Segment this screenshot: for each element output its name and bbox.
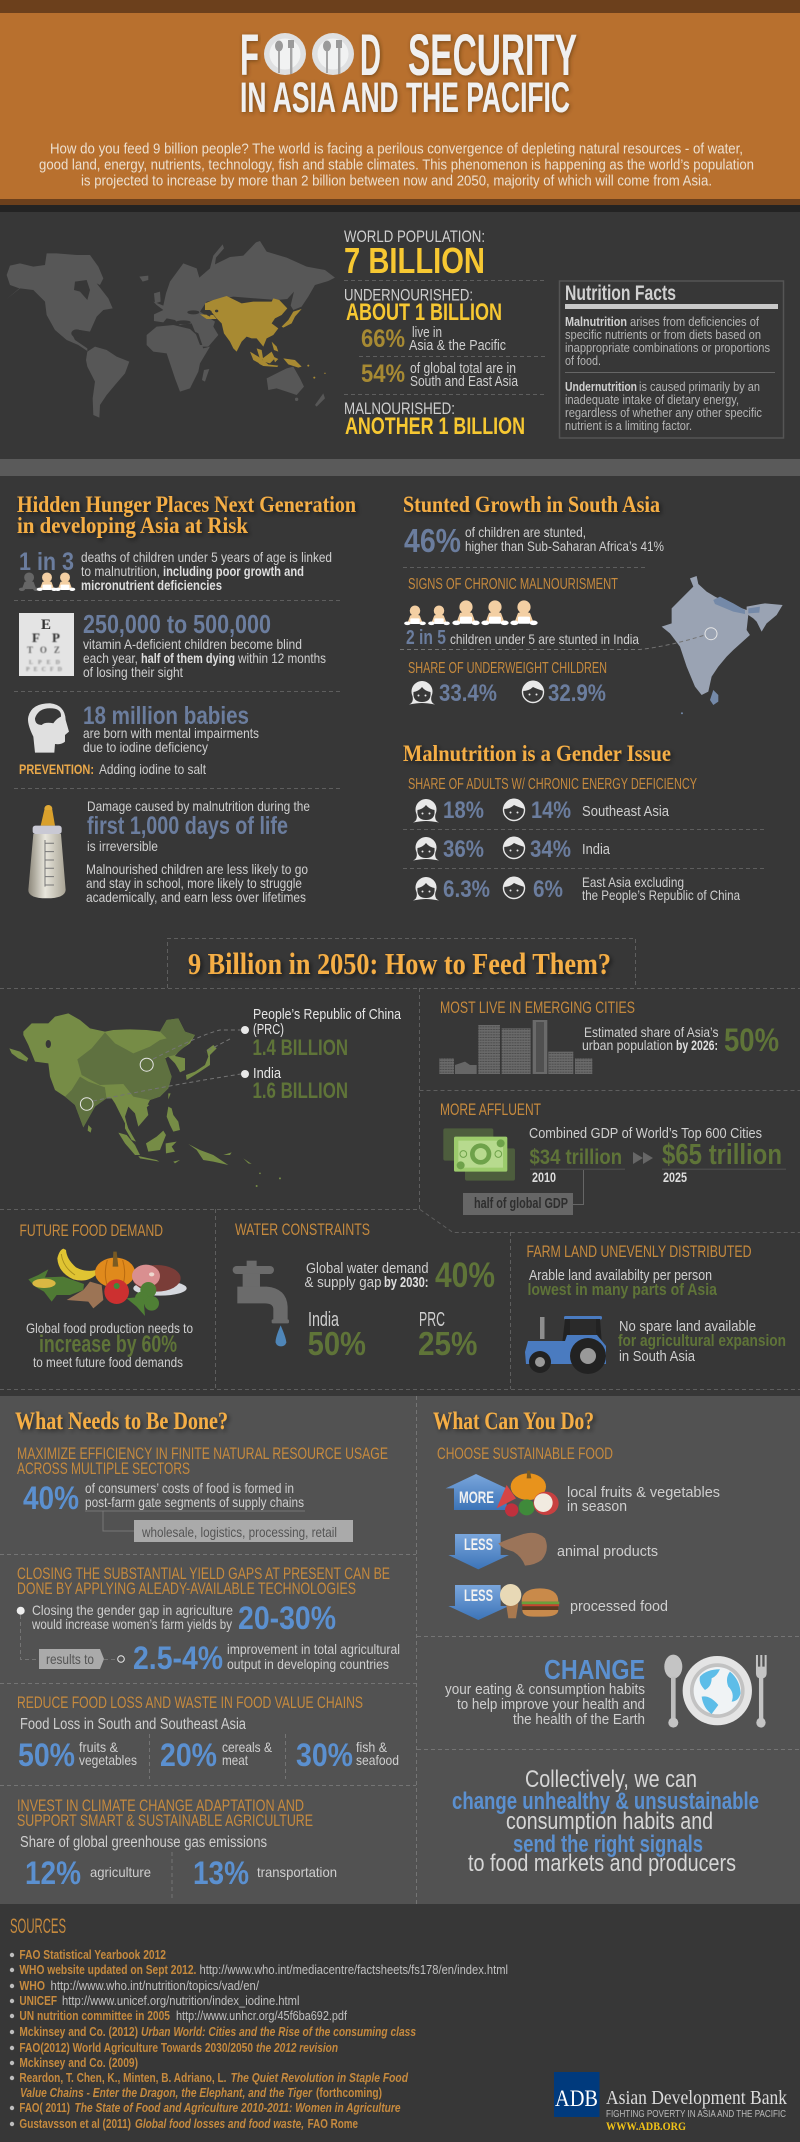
share of underweight children: SHARE OF UNDERWEIGHT CHILDREN: [408, 660, 607, 677]
water constraints: [233, 1221, 495, 1362]
callout: half of global GDP: half of global GDP: [474, 1195, 568, 1212]
bullets: [10, 1953, 14, 2126]
stat: blindness: half of them dying: [141, 650, 235, 666]
block: food loss: vegetables: [79, 1752, 137, 1768]
block: climate change: transportation: [257, 1864, 337, 1880]
signs of chronic malnourishment: 2 in 5: [406, 627, 446, 649]
source list: WHO website updated on Sept 2012.: [19, 1962, 196, 1977]
panel: sources: [10, 1915, 508, 2131]
tag: results to: [39, 1649, 104, 1669]
stat: blindness: 250,000 to 500,000: [83, 609, 271, 639]
block: food loss: Food Loss in South and Southeast Asia: [20, 1716, 246, 1733]
block: food loss: [17, 1694, 399, 1900]
stat: iodine: Adding iodine to salt: [99, 761, 206, 777]
title: D: [360, 23, 381, 88]
panel: nutrition facts: Nutrition Facts: [565, 282, 676, 305]
block: food loss: meat: [222, 1752, 248, 1768]
water constraints: 25%: [418, 1325, 478, 1362]
logo: Asian Development Bank: [554, 2072, 787, 2133]
water constraints: & supply gap: [304, 1274, 382, 1291]
icon: less arrow with meat: [448, 1533, 547, 1569]
panel: nutrition facts: arises from deficiencies of: [630, 314, 759, 329]
panel: nutrition facts: specific nutrients or from diets based on: [565, 327, 761, 342]
block: maximize efficiency: of consumers’ costs of food is formed in: [85, 1480, 294, 1496]
row: East Asia: the People’s Republic of China: [582, 887, 740, 903]
block: food loss: cereals &: [222, 1739, 273, 1755]
icon: eye chart: F: [32, 630, 40, 645]
panel: nutrition facts: nutrient is a limiting factor.: [565, 418, 692, 433]
emerging cities: Estimated share of Asia’s: [584, 1024, 718, 1040]
source list: Value Chains - Enter the Dragon, the Elephant, and the Tiger: [20, 2085, 313, 2100]
row: East Asia: 6%: [533, 876, 563, 903]
heading: [17, 492, 356, 538]
intro paragraph: is projected to increase by more than 2 billion between now and 2050, majority of which will come from Asia.: [81, 174, 712, 190]
stat: 1 in 3: [19, 548, 332, 593]
emerging cities: MOST LIVE IN EMERGING CITIES: [440, 999, 635, 1017]
emerging cities: by 2026:: [676, 1037, 718, 1053]
block: yield gaps: would increase women’s farm yields by: [31, 1616, 232, 1632]
farm land: [525, 1243, 786, 1374]
stat: blindness: each year,: [83, 650, 138, 666]
block: yield gaps: improvement in total agricultural: [227, 1641, 400, 1657]
block: climate change: agriculture: [90, 1864, 151, 1880]
panel: nutrition facts: inappropriate combinations or proportions: [565, 340, 770, 355]
farm land: Arable land availabilty per person: [529, 1268, 712, 1284]
block: climate change: INVEST IN CLIMATE CHANGE ADAPTATION AND: [17, 1797, 304, 1815]
undernourished stat: UNDERNOURISHED:: [344, 286, 473, 304]
water constraints: WATER CONSTRAINTS: [235, 1221, 370, 1239]
more affluent: [440, 1101, 786, 1215]
block: food loss: 20%: [160, 1737, 217, 1773]
row: Southeast Asia: Southeast Asia: [582, 804, 670, 820]
logo: Asian Development Bank: ADB: [555, 2086, 598, 2111]
heading: Hidden Hunger Places Next Generation: [17, 492, 356, 517]
panel: 9 billion in 2050: [0, 938, 800, 1390]
row: India: 36%: [443, 836, 484, 863]
icon: baby bottle: [28, 805, 66, 898]
panel: what can you do: [417, 1408, 800, 1877]
source list: The State of Food and Agriculture 2010-2011: Women in Agriculture: [74, 2100, 400, 2115]
stat: 1 in 3: deaths of children under 5 years of age is linked: [81, 549, 332, 565]
intro paragraph: [39, 142, 754, 190]
source list: WHO: [19, 1978, 45, 1993]
block: change habits: your eating & consumption habits: [445, 1681, 645, 1698]
block: maximize efficiency: post-farm gate segments of supply chains: [85, 1494, 304, 1510]
stat: first 1,000 days: and stay in school, more likely to struggle: [86, 875, 302, 891]
future food demand: increase by 60%: [39, 1331, 177, 1358]
stat: 46%: of children are stunted,: [465, 524, 586, 540]
panel: nutrition facts: [560, 281, 784, 438]
icon: eye chart: PECFD: [26, 667, 66, 673]
undernourished stat: ABOUT 1 BILLION: [346, 299, 502, 326]
source list: Mckinsey and Co. (2012): [19, 2024, 138, 2039]
heading: in developing Asia at Risk: [17, 513, 248, 538]
stat: iodine: [19, 702, 259, 777]
block: food loss: fish &: [356, 1739, 388, 1755]
source list: the 2012 revision: [256, 2040, 338, 2055]
panel: stunted growth: [400, 492, 783, 714]
block: yield gaps: output in developing countries: [227, 1656, 389, 1672]
map labels and markers: [80, 1006, 402, 1110]
stat: first 1,000 days: Malnourished children are less likely to go: [86, 861, 308, 877]
text: processed food: processed food: [570, 1598, 668, 1615]
panel: nutrition facts: is caused primarily by an: [639, 379, 760, 394]
icon: tractor: [525, 1316, 606, 1374]
icon: less arrow with processed food: [448, 1584, 559, 1620]
water constraints: Global water demand: [306, 1260, 428, 1277]
source list: FAO Statistical Yearbook 2012: [19, 1947, 166, 1962]
stat: iodine: due to iodine deficiency: [83, 739, 208, 755]
undernourished stat: [344, 286, 519, 390]
block: maximize efficiency: MAXIMIZE EFFICIENCY IN FINITE NATURAL RESOURCE USAGE: [17, 1445, 388, 1463]
world population stat: WORLD POPULATION:: [344, 227, 485, 246]
row: India: 34%: [530, 836, 571, 863]
heading: 9 Billion in 2050: How to Feed Them?: [188, 946, 611, 981]
panel: what can you do: MORE: [459, 1488, 494, 1507]
row: East Asia: [413, 874, 740, 903]
world population stat: 7 BILLION: [344, 240, 485, 281]
more affluent: $34 trillion: [530, 1146, 622, 1169]
icon: plate with globe, spoon and fork: [664, 1655, 767, 1728]
malnourished stat: ANOTHER 1 BILLION: [345, 413, 525, 440]
share of underweight children: 32.9%: [548, 680, 606, 707]
source list: The Quiet Revolution in Staple Food: [231, 2070, 409, 2085]
map: India: [662, 576, 783, 714]
icon: skyline: [439, 1020, 592, 1074]
panel: nutrition facts: inadequate intake of dietary energy,: [565, 392, 739, 407]
undernourished stat: South and East Asia: [410, 373, 519, 390]
heading: SOURCES: [10, 1915, 66, 1938]
source list: http://www.unicef.org/nutrition/index_iodine.html: [62, 1993, 300, 2008]
block: maximize efficiency: ACROSS MULTIPLE SECTORS: [17, 1460, 190, 1478]
map labels and markers: 1.6 BILLION: [252, 1078, 348, 1103]
source list: FAO( 2011): [19, 2100, 70, 2115]
icon: head with brain: [28, 703, 69, 753]
callout: half of global GDP: [463, 1193, 573, 1215]
text: local fruits: in season: [567, 1498, 627, 1515]
map labels and markers: 1.4 BILLION: [252, 1035, 348, 1060]
stat: iodine: 18 million babies: [83, 702, 249, 730]
lower section background: [0, 1396, 800, 1904]
source list: Urban World: Cities and the Rise of the consuming class: [141, 2024, 416, 2039]
icon: second plate: [312, 33, 354, 75]
panel: nutrition facts: of food.: [565, 353, 601, 368]
stat: first 1,000 days: Damage caused by malnutrition during the: [87, 798, 310, 814]
signs of chronic malnourishment: SIGNS OF CHRONIC MALNOURISMENT: [408, 576, 618, 593]
stat: blindness: [83, 609, 326, 680]
block: collective call to action: [452, 1766, 759, 1877]
block: yield gaps: Closing the gender gap in agriculture: [32, 1602, 233, 1618]
stat: 1 in 3: to malnutrition,: [81, 563, 160, 579]
future food demand: to meet future food demands: [33, 1354, 183, 1370]
heading: Stunted Growth in South Asia: [403, 492, 660, 517]
stat: first 1,000 days: [86, 798, 310, 905]
arrow: growth: [633, 1152, 653, 1164]
source list: http://www.who.int/nutrition/topics/vad/en/: [50, 1978, 259, 1993]
panel: nutrition facts: Malnutrition: [565, 314, 627, 329]
water constraints: PRC: [419, 1309, 445, 1331]
panel: header: [0, 0, 800, 212]
block: collective call to action: consumption habits and: [506, 1808, 713, 1835]
block: climate change: 12%: [25, 1855, 81, 1891]
block: climate change: Share of global greenhouse gas emissions: [20, 1834, 267, 1851]
source list: http://www.unhcr.org/45f6ba692.pdf: [176, 2008, 347, 2023]
icon: eye chart: [19, 613, 74, 676]
share of underweight children: [408, 660, 607, 707]
signs of chronic malnourishment: children under 5 are stunted in India: [450, 631, 639, 647]
block: collective call to action: send the right signals: [513, 1831, 703, 1858]
more affluent: 2025: [663, 1170, 687, 1185]
undernourished stat: of global total are in: [410, 360, 516, 377]
source list: Reardon, T. Chen, K., Minten, B. Adriano, L.: [19, 2070, 227, 2085]
intro paragraph: How do you feed 9 billion people? The world is facing a perilous convergence of depleting natural resources - of water,: [50, 142, 743, 158]
source list: FAO(2012) World Agriculture Towards 2030/2050: [19, 2040, 253, 2055]
block: change habits: to help improve your health and: [457, 1696, 645, 1713]
block: climate change: [17, 1797, 337, 1891]
divider band: [0, 459, 800, 476]
source list: FAO Rome: [308, 2116, 358, 2131]
world map: [7, 241, 335, 418]
title: SECURITY: [408, 23, 577, 88]
signs of chronic malnourishment: [404, 576, 639, 649]
block: yield gaps: DONE BY APPLYING ALEADY-AVAILABLE TECHNOLOGIES: [17, 1580, 356, 1598]
row: Southeast Asia: 18%: [443, 797, 484, 824]
row: East Asia: 6.3%: [443, 876, 490, 903]
block: change habits: [445, 1654, 645, 1728]
future food demand: [20, 1222, 193, 1370]
share of underweight children: 33.4%: [439, 680, 497, 707]
stat: 1 in 3: 1 in 3: [19, 548, 74, 576]
stat: blindness: within 12 months: [237, 650, 326, 666]
subheading: CHOOSE SUSTAINABLE FOOD: [437, 1445, 613, 1463]
map labels and markers: People’s Republic of China: [253, 1006, 402, 1023]
logo: Asian Development Bank: WWW.ADB.ORG: [606, 2119, 686, 2133]
undernourished stat: live in: [412, 324, 442, 341]
panel: gender issue: [403, 741, 767, 903]
block: yield gaps: [17, 1565, 400, 1676]
water constraints: 40%: [435, 1256, 495, 1295]
malnourished stat: [344, 399, 525, 440]
block: change habits: the health of the Earth: [513, 1711, 645, 1728]
icon: eye chart: P: [52, 630, 60, 645]
icon: faucet: [233, 1261, 289, 1346]
title: IN ASIA AND THE PACIFIC: [240, 74, 570, 122]
block: yield gaps: 2.5-4%: [133, 1640, 223, 1676]
map: Asia: [9, 1013, 281, 1187]
panel: what can you do: LESS: [464, 1535, 493, 1554]
block: yield gaps: CLOSING THE SUBSTANTIAL YIELD GAPS AT PRESENT CAN BE: [17, 1565, 390, 1583]
stat: 46%: [404, 522, 664, 559]
title: F: [240, 23, 259, 88]
farm land: No spare land available: [619, 1318, 756, 1335]
panel: hidden hunger: [14, 492, 356, 905]
water constraints: by 2030:: [384, 1274, 428, 1291]
block: maximize efficiency: [17, 1445, 388, 1542]
future food demand: Global food production needs to: [26, 1320, 193, 1336]
world population stat: [344, 227, 485, 281]
title: [240, 23, 577, 122]
block: food loss: seafood: [356, 1752, 399, 1768]
block: collective call to action: Collectively, we can: [525, 1766, 697, 1793]
stat: first 1,000 days: first 1,000 days of life: [87, 812, 288, 840]
row: India: [413, 836, 611, 863]
source list: Global food losses and food waste,: [135, 2116, 304, 2131]
undernourished stat: 66%: [361, 325, 405, 353]
source list: UN nutrition committee in 2005: [19, 2008, 170, 2023]
stat: blindness: of losing their sight: [83, 664, 183, 680]
source list: (forthcoming): [316, 2085, 382, 2100]
map labels and markers: (PRC): [253, 1021, 284, 1038]
water constraints: 50%: [308, 1325, 366, 1362]
text: local fruits: [567, 1484, 720, 1515]
icon: more arrow with fruit and vegetables: [446, 1471, 559, 1517]
stat: iodine: PREVENTION:: [19, 761, 94, 777]
block: climate change: 13%: [193, 1855, 249, 1891]
text: local fruits: local fruits & vegetables: [567, 1484, 720, 1501]
block: food loss: fruits &: [79, 1739, 119, 1755]
source list: http://www.who.int/mediacentre/factsheets/fs178/en/index.html: [200, 1962, 508, 1977]
panel: what can you do: LESS: [464, 1586, 493, 1605]
undernourished stat: 54%: [361, 360, 405, 388]
source list: UNICEF: [19, 1993, 57, 2008]
heading: What Needs to Be Done?: [15, 1408, 228, 1435]
icon: food group: [28, 1249, 187, 1316]
source list: [19, 1947, 508, 2131]
row: India: India: [582, 842, 611, 858]
heading: What Can You Do?: [433, 1408, 594, 1435]
water constraints: India: [308, 1309, 340, 1331]
icon: eye chart: E: [41, 617, 51, 633]
block: maximize efficiency: 40%: [23, 1480, 79, 1516]
panel: world population: [7, 227, 783, 440]
stat: 1 in 3: micronutrient deficiencies: [81, 577, 222, 593]
panel: what needs to be done: [0, 1408, 416, 1900]
emerging cities: urban population: [582, 1037, 673, 1053]
malnourished stat: MALNOURISHED:: [344, 399, 455, 418]
text: animal products: animal products: [557, 1543, 658, 1560]
callout: supply chain segments: [134, 1520, 353, 1542]
icon: eye chart: LPED: [29, 660, 65, 666]
block: food loss: REDUCE FOOD LOSS AND WASTE IN FOOD VALUE CHAINS: [17, 1694, 363, 1712]
stat: first 1,000 days: academically, and earn less over lifetimes: [86, 889, 306, 905]
stat: 1 in 3: including poor growth and: [163, 563, 304, 579]
stat: 46%: higher than Sub-Saharan Africa’s 41%: [465, 538, 664, 554]
row: East Asia: East Asia excluding: [582, 874, 684, 890]
stat: blindness: vitamin A-deficient children become blind: [83, 636, 302, 652]
block: food loss: 30%: [296, 1737, 353, 1773]
stat: 46%: 46%: [404, 522, 461, 559]
panel: nutrition facts: regardless of whether any other specific: [565, 405, 762, 420]
panel: nutrition facts: Undernutrition: [565, 379, 637, 394]
map labels and markers: India: [253, 1065, 282, 1082]
icon: banknotes: [443, 1128, 515, 1181]
block: food loss: 50%: [18, 1737, 75, 1773]
more affluent: 2010: [532, 1170, 556, 1185]
more affluent: MORE AFFLUENT: [440, 1101, 541, 1119]
block: yield gaps: 20-30%: [238, 1600, 336, 1636]
tag: results to: results to: [46, 1651, 94, 1667]
stat: first 1,000 days: is irreversible: [87, 838, 158, 854]
source list: Gustavsson et al (2011): [19, 2116, 131, 2131]
icon: eye chart: TOZ: [27, 645, 67, 655]
more affluent: Combined GDP of World’s Top 600 Cities: [529, 1125, 762, 1142]
heading: Malnutrition is a Gender Issue: [403, 741, 671, 766]
block: collective call to action: to food markets and producers: [468, 1850, 736, 1877]
block: change habits: CHANGE: [544, 1654, 645, 1685]
farm land: lowest in many parts of Asia: [528, 1280, 717, 1299]
icon: plate: [264, 33, 306, 75]
farm land: in South Asia: [619, 1348, 696, 1365]
callout: supply chain segments: wholesale, logistics, processing, retail: [141, 1524, 337, 1540]
row: Southeast Asia: [413, 797, 670, 824]
stat: iodine: are born with mental impairments: [83, 725, 259, 741]
undernourished stat: Asia & the Pacific: [409, 337, 506, 354]
emerging cities: 50%: [724, 1022, 779, 1058]
block: climate change: SUPPORT SMART & SUSTAINABLE AGRICULTURE: [17, 1812, 313, 1830]
emerging cities: [439, 999, 779, 1074]
source list: Mckinsey and Co. (2009): [19, 2055, 138, 2070]
row: Southeast Asia: 14%: [531, 797, 571, 824]
future food demand: FUTURE FOOD DEMAND: [20, 1222, 163, 1240]
